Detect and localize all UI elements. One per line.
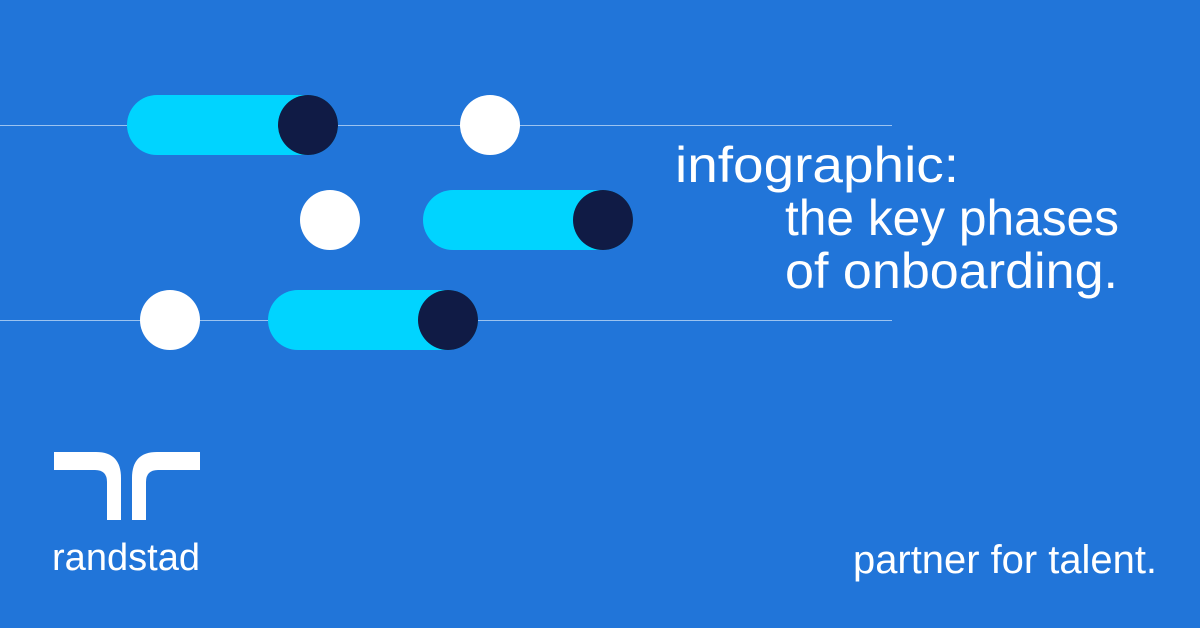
phase row 3 <box>140 290 478 350</box>
title: of onboarding. <box>785 243 1118 299</box>
white circle 2 <box>300 190 360 250</box>
title <box>675 137 1119 299</box>
phase row 1 <box>127 95 520 155</box>
logo mark <box>54 452 121 520</box>
dark circle 2 <box>573 190 633 250</box>
title: the key phases <box>785 190 1119 246</box>
pill 3 <box>268 290 478 350</box>
white circle 3 <box>140 290 200 350</box>
title: infographic: <box>675 137 959 193</box>
dark circle 1 <box>278 95 338 155</box>
logo wordmark: randstad <box>52 537 200 579</box>
logo: randstad <box>52 452 200 579</box>
pill 1 <box>127 95 338 155</box>
dark circle 3 <box>418 290 478 350</box>
white circle 1 <box>460 95 520 155</box>
phase row 2 <box>300 190 633 250</box>
tagline: partner for talent. <box>853 538 1157 582</box>
pill 2 <box>423 190 633 250</box>
